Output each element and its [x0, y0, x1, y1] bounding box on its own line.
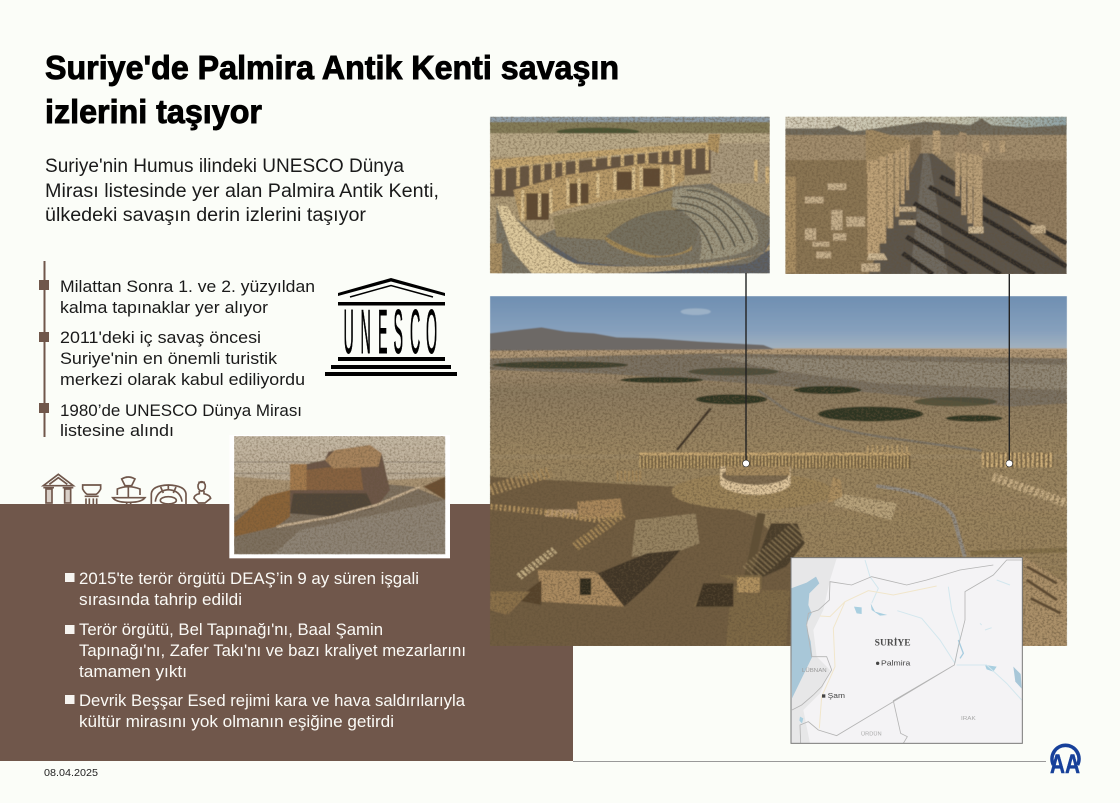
title: izlerini taşıyor [45, 93, 262, 130]
icon: UNESCO logo: S [394, 296, 403, 367]
intro text: ülkedeki savaşın derin izlerini taşıyor [45, 205, 367, 226]
map label: Şam: Şam [828, 691, 845, 700]
timeline list: history facts: 2011'deki iç savaş öncesi [60, 328, 261, 347]
map label: Ürdün: ÜRDÜN [861, 730, 882, 737]
timeline list: history facts: Milattan Sonra 1. ve 2. yüzyıldan [60, 277, 315, 296]
icons: ancient monuments row [43, 474, 211, 505]
icon: UNESCO logo [325, 278, 457, 376]
icon: UNESCO logo: E [378, 296, 388, 367]
panel bullet list: war damage: Terör örgütü, Bel Tapınağı'nı, Baal Şamin [79, 620, 383, 639]
timeline list: history facts: Suriye'nin en önemli turistik [60, 349, 278, 368]
panel bullet list: war damage: tamamen yıktı [79, 662, 187, 681]
intro text: Mirası listesinde yer alan Palmira Antik Kenti, [45, 181, 439, 202]
icon: column capital [83, 485, 101, 504]
map label: Irak: IRAK [961, 716, 976, 722]
photo: aerial view of Palmira [490, 296, 1067, 647]
map: Syria location [791, 558, 1022, 743]
castle photo with white frame [229, 435, 450, 558]
icon: UNESCO logo: U [344, 296, 354, 367]
title [45, 49, 619, 130]
timeline list: history facts: 1980’de UNESCO Dünya Mirası [60, 401, 302, 420]
map label: Şam [822, 691, 845, 700]
panel bullet list: war damage: Tapınağı'nı, Zafer Takı'nı ve bazı kraliyet mezarlarını [79, 641, 466, 660]
icon: temple [43, 474, 73, 503]
title: Suriye'de Palmira Antik Kenti savaşın [45, 49, 619, 86]
map label: Suriye: SURİYE [875, 638, 911, 648]
icon: Anadolu Agency logo: AA [1050, 749, 1080, 779]
icon: amphitheatre [151, 485, 186, 504]
photo: colonnaded street [785, 117, 1067, 274]
icon: fountain [113, 477, 145, 505]
timeline list: history facts: kalma tapınaklar yer alıyor [60, 298, 268, 317]
timeline list: history facts: merkezi olarak kabul ediliyordu [60, 370, 305, 389]
brown text panel [0, 504, 573, 761]
icon: UNESCO logo: C [410, 296, 420, 367]
map label: Lübnan: LÜBNAN [802, 667, 827, 674]
date: 08.04.2025 [44, 767, 98, 779]
icon: UNESCO logo: N [360, 296, 371, 367]
panel bullet list: war damage: sırasında tahrip edildi [79, 590, 242, 609]
icon: UNESCO logo: O [426, 296, 437, 367]
timeline list: history facts [39, 261, 315, 440]
icon: bust [194, 482, 211, 503]
panel bullet list: war damage [65, 569, 466, 731]
connector: colonnade photo to aerial view [1006, 274, 1013, 467]
panel bullet list: war damage: kültür mirasını yok olmanın eşiğine getirdi [79, 712, 394, 731]
panel bullet list: war damage: Devrik Beşşar Esed rejimi kara ve hava saldırılarıyla [79, 691, 466, 710]
connector: theatre photo to aerial view [743, 273, 749, 467]
photo: Roman theatre [490, 117, 770, 274]
intro text [45, 156, 439, 226]
intro text: Suriye'nin Humus ilindeki UNESCO Dünya [45, 156, 404, 177]
map label: Palmira: Palmira [881, 658, 911, 667]
panel bullet list: war damage: 2015'te terör örgütü DEAŞ’in 9 ay süren işgali [79, 569, 419, 588]
footer rule [573, 761, 1046, 762]
timeline list: history facts: listesine alındı [60, 421, 174, 440]
